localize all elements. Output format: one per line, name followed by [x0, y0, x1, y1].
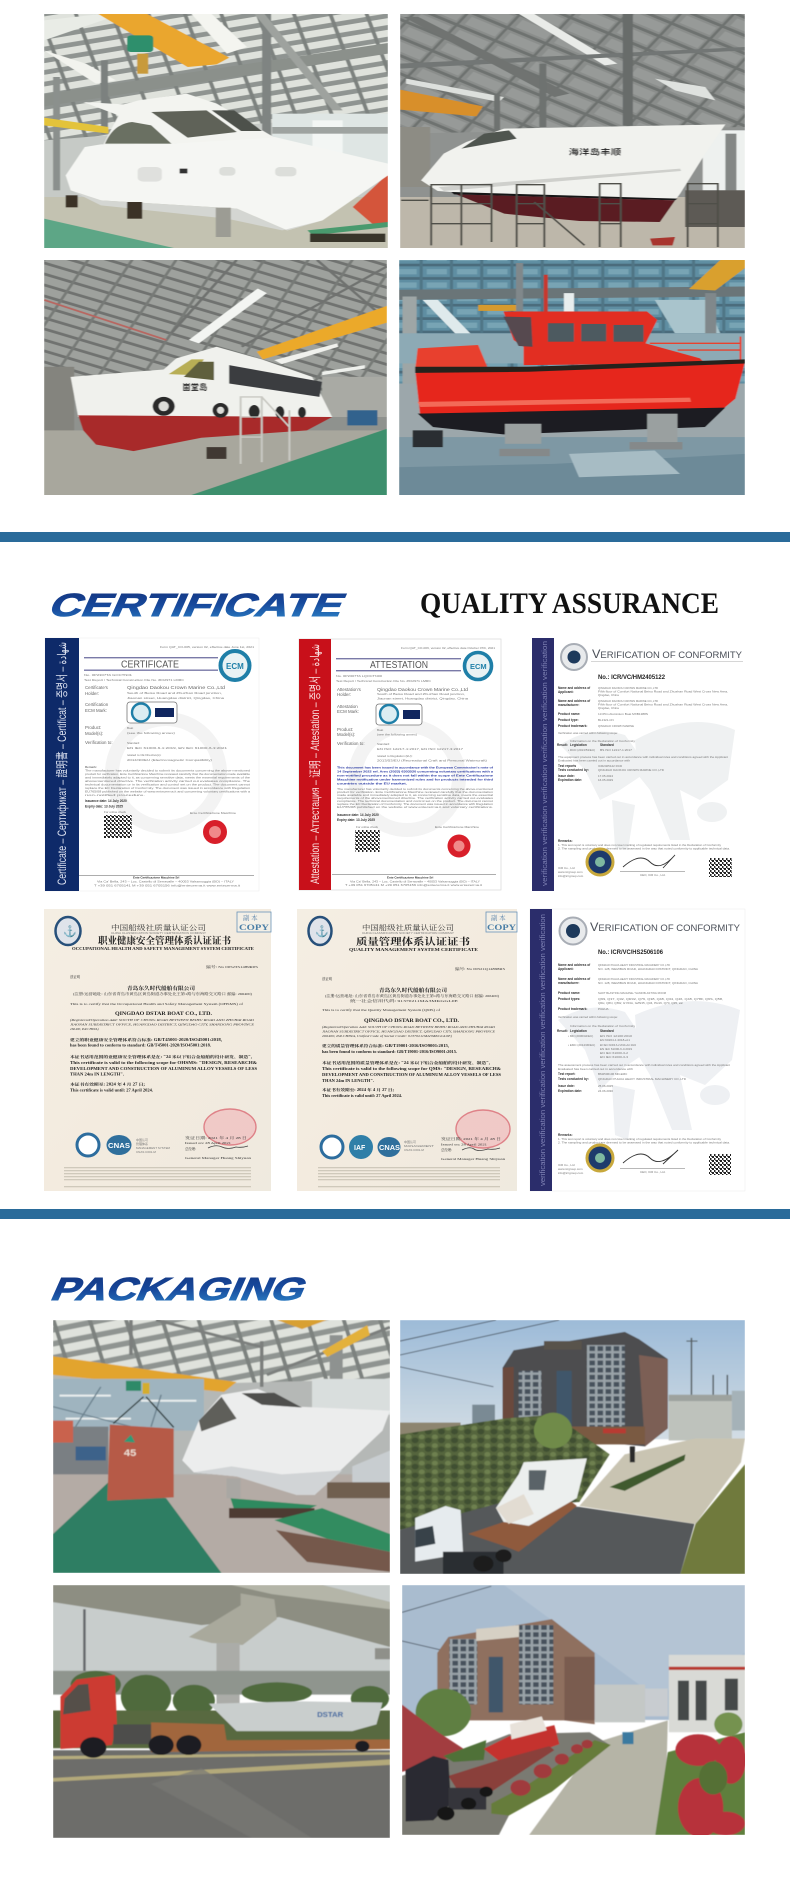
certificate: occupational health and safety management system: CHINA CLASSIFICATION SOCIETY CERTIFICATION COMPANY	[111, 931, 206, 935]
certificate: verification of conformity ICR/VC/HM2405122: Applicant:	[558, 690, 574, 694]
photo: red truck carrying hull under overpass	[53, 1585, 390, 1838]
certificate: verification of conformity ICR/VC/HM2405122: Remarks:	[558, 839, 573, 843]
certificate: quality management system: 青岛东久时代船舶有限公司	[379, 987, 447, 994]
certificate: ECM certificate: Test Report / Technical Construction File No. #IO2971 LMRC	[84, 678, 185, 682]
certificate: verification of conformity ICR/VC/HS2506106: PUHUA	[598, 1007, 609, 1011]
certificate: occupational health and safety management system: 建立的职业健康安全管理体系符合标准: GB/T45001-2020/ISO45001:2018,	[70, 1037, 222, 1042]
certificate: verification of conformity ICR/VC/HM2405122: Product name:	[558, 712, 580, 716]
certificate: verification of conformity ICR/VC/HS2506106: Test report:	[558, 1072, 575, 1076]
certificate: quality management system: 发证日期: 2021 年 4 月 28 日	[441, 1136, 501, 1141]
photo: red patrol boat in workshop	[399, 260, 745, 495]
certificate: ECM attestation: Product:	[337, 727, 353, 732]
certificate: verification of conformity ICR/VC/HM2405122: Legislation	[570, 743, 587, 747]
certificate: ECM certificate: ECM	[226, 662, 244, 671]
certificate: ECM certificate: Form QAT_CO-005, version 02, effective date June 1st, 2021	[160, 645, 254, 649]
certificate: occupational health and safety management system: CNAS	[108, 1143, 130, 1150]
heading: quality assurance: QUALITY ASSURANCE	[420, 587, 719, 620]
certificate: ECM certificate: ECM Mark:	[85, 708, 107, 713]
certificate: verification of conformity ICR/VC/HM2405122: manufacturer:	[558, 703, 579, 707]
certificate: verification of conformity ICR/VC/HS2506106: QINGDAO PUHUA HEAVY INDUSTRIAL MACHINERY CO.,LTD	[598, 1077, 687, 1081]
certificate: ECM certificate: Certificate – Сертификат – 證明書 – Certificat – 증명서 – شهادة	[54, 642, 69, 885]
certificate: ECM certificate: Certificate's	[85, 685, 109, 690]
certificate: occupational health and safety management system: QINGDAO DSTAR BOAT CO., LTD.	[115, 1011, 213, 1017]
heading: certificate: CERTIFICATE	[44, 588, 351, 624]
certificate: verification of conformity ICR/VC/HM2405122	[532, 638, 745, 891]
certificate: occupational health and safety management system: (Registered/Operation Add: SOUTH OF CHONG ROAD BETWEEN BEIHU ROAD AND ZHUHAI ROAD	[70, 1018, 255, 1022]
certificate: quality management system: 本证书适用范围的质量管理体系是在: "24 米以下铝合金船舶的设计研发、制造",	[322, 1060, 490, 1065]
certificate: verification of conformity ICR/VC/HM2405122: Fifth floor of Comfort National Beisu Road and Zhuzhan Road West Cross New Area,	[598, 702, 728, 706]
certificate: verification of conformity ICR/VC/HM2405122: Qingdao, China	[598, 693, 619, 697]
certificate: ECM certificate: T +39 051 6705141 M +39 051 6705156 info@entecerma.it www.entecerma.it	[94, 884, 240, 888]
certificate: verification of conformity ICR/VC/HS2506106: Product name:	[558, 991, 580, 995]
certificate: ECM attestation: Attestation's	[337, 687, 362, 692]
certificate: ECM certificate: Certification	[85, 702, 109, 707]
certificate: quality management system: 编号: No 00521Q14898RS	[455, 966, 505, 971]
certificate: quality management system: Issued on: 28 April 2021	[441, 1142, 487, 1146]
certificate: verification of conformity ICR/VC/HM2405122: QINGDAO CROWN MARINE	[598, 724, 634, 728]
certificate: ECM certificate: product for verification. Ente Certificazione Macchine reviewed carefully that the documentation made available	[85, 772, 250, 776]
certificate: ECM attestation: Macchine notification under harmonized rules and for products intended for third	[337, 778, 493, 782]
certificate: verification of conformity ICR/VC/HM2405122: Standard	[600, 743, 614, 747]
certificate: verification of conformity ICR/VC/HS2506106: manufacturer:	[558, 981, 579, 985]
certificate: ECM certificate: technical documentation or in its verification and control set on the product. The document cannot	[85, 782, 250, 786]
certificate: ECM certificate: and immediately adapted to it, as concerning sensitive data, meets the essential requirements of the	[85, 776, 250, 780]
certificate: verification of conformity ICR/VC/HM2405122: Verification was carried within following scope:	[558, 731, 618, 735]
certificate: verification of conformity ICR/VC/HS2506106: Tests conducted by:	[558, 1077, 589, 1081]
photo: truck carrying red boat outside factory	[402, 1585, 745, 1835]
certificate: occupational health and safety management system: ⚓	[63, 925, 77, 938]
certificate: quality management system: 中国船级社质量认证公司	[362, 923, 454, 932]
certificate: ECM certificate: 2014/30/EU (Electromagnetic Compatibility)	[127, 758, 212, 762]
divider band: middle	[0, 1209, 790, 1219]
certificate: ECM certificate: replace the EC Declaration of Conformity. The document was issued in accordance with Regulation	[85, 786, 250, 790]
certificate: ECM attestation: Jiaonan street, Huangdao district, Qingdao, China	[377, 696, 468, 700]
certificate: occupational health and safety management system: 职业健康安全管理体系认证证书	[98, 935, 231, 947]
certificate: verification of conformity ICR/VC/HM2405122: BS ISO 12217-1:2017	[600, 748, 632, 752]
certificate: ECM certificate: Product:	[85, 725, 101, 730]
certificate: ECM attestation: non-notified procedure as it does not fall within the scope of Ente Certificazione	[337, 774, 493, 778]
certificate: ECM attestation: Holder:	[337, 692, 351, 697]
certificate: occupational health and safety management system: JIAONAN SUBDISTRICT OFFICE, HUANGDAO DISTRICT, QINGDAO CITY, SHANDONG PROVINCE	[70, 1022, 255, 1028]
certificate: verification of conformity ICR/VC/HS2506106: 25.06.2025	[598, 1084, 613, 1088]
certificate: quality management system: 副 本	[491, 913, 506, 922]
certificate: ECM attestation: For online check	[356, 825, 379, 829]
certificate: verification of conformity ICR/VC/HS2506106: EN IEC 61000-3-2	[600, 1051, 628, 1055]
certificate: ECM certificate: Via Ca' Bella, 243 – Loc. Castello di Serravalle – 40053 Valsamoggia (BO) – ITALY	[97, 880, 234, 884]
certificate: quality management system: DEVELOPMENT AND CONSTRUCTION OF ALUMINUM ALLOY VESSELS OF LESS	[322, 1073, 501, 1077]
certificate: ECM certificate: Qingdao Daokou Crown Marine Co.,Ltd	[127, 685, 226, 690]
certificate: verification of conformity ICR/VC/HS2506106: www.icrgroup.com	[558, 1167, 583, 1171]
certificate: ECM attestation: No. 0P2307TA LQOCTN00	[336, 674, 382, 678]
certificate: verification of conformity ICR/VC/HM2405122: 17.05.2024	[598, 774, 613, 778]
certificate: occupational health and safety management system: 青岛东久时代船舶有限公司	[127, 985, 195, 992]
certificate: occupational health and safety management system: (注册/运营地址: 山东省青岛市黄岛区黄岛街道办事处北王第1路与东海路交叉路口 邮编: 266400)	[73, 991, 252, 996]
certificate: ECM attestation: related to Regulation (EU):	[377, 754, 413, 758]
certificate: verification of conformity ICR/VC/HM2405122: www.icrgroup.com	[558, 870, 583, 874]
certificate: verification of conformity ICR/VC/HS2506106: EN IEC 61000-6-2:2019+AC:2024	[600, 1043, 636, 1047]
divider band: top	[0, 532, 790, 542]
certificate: ECM attestation: (see the following annex)	[377, 732, 417, 736]
certificate: verification of conformity ICR/VC/HM2405122: Fifth floor of Comfort National Beisu Road and Zhuzhan Road West Cross New Area,	[598, 690, 728, 694]
certificate: ECM attestation: ECM Mark:	[337, 709, 359, 714]
certificate: occupational health and safety management system: COPY	[239, 922, 269, 932]
certificate: ECM attestation: Standard:	[377, 742, 390, 746]
certificate: verification of conformity ICR/VC/HM2405122: Product trademark:	[558, 724, 587, 728]
certificate: verification of conformity ICR/VC/HS2506106: Expiration date:	[558, 1089, 582, 1093]
certificate: verification of conformity ICR/VC/HS2506106: QINGDAO PUHUA HEAVY INDUSTRIAL MACHINERY CO.,LTD	[598, 963, 671, 967]
certificate: verification of conformity ICR/VC/HS2506106: • EMC (2014/30/EU)	[568, 1043, 595, 1047]
certificate: ECM certificate: Issuance date: 14 July 2020	[85, 799, 127, 803]
certificate: ECM certificate: EN IEC 61000-6-1:2019, EN IEC 61000-6-3:2021	[127, 746, 227, 750]
certificate: ECM attestation: replace the EC Declaration of Conformity. The document was issued in accordance with Regulation	[337, 802, 493, 806]
certificate: occupational health and safety management system: 总经理:	[185, 1146, 196, 1151]
certificate: verification of conformity ICR/VC/HS2506106: Product trademark:	[558, 1007, 587, 1011]
certificate: quality management system: CNAS C001-M	[404, 1148, 424, 1152]
certificate: verification of conformity ICR/VC/HS2506106: Standard	[600, 1029, 614, 1033]
certificate: ECM certificate: No. 0P2307TA GOCTN01	[84, 673, 132, 677]
certificate: quality management system: 建立的质量管理体系符合标准: GB/T19001-2016/ISO9001:2015,	[322, 1043, 449, 1048]
certificate: quality management system: 中国认可	[404, 1139, 416, 1144]
certificate: occupational health and safety management system: DEVELOPMENT AND CONSTRUCTION OF ALUMINUM ALLOY VESSELS OF LESS	[70, 1067, 257, 1071]
certificate: verification of conformity ICR/VC/HS2506106: Remarks:	[558, 1133, 573, 1137]
certificate: occupational health and safety management system: THAN 24m IN LENGTH".	[70, 1072, 124, 1076]
certificate: occupational health and safety management system: 本证书有效期至: 2024 年 4 月 27 日;	[70, 1082, 145, 1086]
certificate: verification of conformity ICR/VC/HM2405122: verification verification verification verification verification verification	[542, 641, 549, 886]
certificate: ECM attestation: product for verification. Ente Certificazione Macchine reviewed carefully that the documentation	[337, 790, 493, 794]
certificate: ECM certificate: Ente Certificazione Macchine	[190, 811, 236, 815]
certificate: quality management system: 本证书有效期至: 2024 年 4 月 27 日;	[322, 1087, 394, 1092]
certificate: verification of conformity ICR/VC/HS2506106: NO. 128, WEIZIBAN ROAD, HUANGDAO DISTRICT, QINGDAO, CHINA	[598, 967, 698, 971]
certificate: quality management system: 兹证明	[322, 976, 333, 981]
certificate: quality management system: 质量管理体系认证证书	[356, 936, 471, 948]
certificate: verification of conformity ICR/VC/HS2506106: Q69, Q37, Q32, QR32, Q76, Q38, Q48, Q34, Q46, Q48, Q78F, Q6S, Q58,	[598, 997, 723, 1001]
certificate: occupational health and safety management system: 管理体系	[136, 1141, 148, 1146]
certificate: occupational health and safety management system: 副 本	[243, 913, 258, 922]
certificate: ECM certificate: abovementioned directive. The verification activity carried out evaluates compliance. The	[85, 779, 250, 783]
certificate: verification of conformity ICR/VC/HS2506106: ICR Co., Ltd	[558, 1163, 575, 1167]
certificate: ECM certificate: Remark:	[85, 765, 97, 769]
photo: white motor yacht hull in workshop	[44, 14, 388, 248]
certificate: ECM attestation: made available and immediately adapted to it, as concerning sensitive data, meets the essential	[337, 793, 493, 797]
certificate: verification of conformity ICR/VC/HM2405122: Qingdao, China	[598, 706, 619, 710]
certificate: verification of conformity ICR/VC/HM2405122: CEO, ICR Co., Ltd.	[640, 873, 666, 877]
certificate: verification of conformity ICR/VC/HS2506106: Name and address of	[558, 963, 591, 967]
certificate: verification of conformity ICR/VC/HM2405122: 1. This test report is voluntary and does not cover marking of regulated requirements listed in the Declaration of Conformity	[558, 843, 721, 847]
certificate: ECM certificate: The manufacturer has voluntarily decided to submit its documents concerning the above-mentioned	[85, 768, 250, 772]
photo: yacht and shipping container in workshop	[53, 1320, 390, 1573]
certificate: occupational health and safety management system: This is to certify that the Occupational Health and Safety Management System (OHSMS) of	[70, 1002, 244, 1006]
certificate: verification of conformity ICR/VC/HS2506106: NO. 128, WEIZIBAN ROAD, HUANGDAO DISTRICT, QINGDAO, CHINA	[598, 981, 698, 985]
certificate: verification of conformity ICR/VC/HM2405122: VERIFICATION OF CONFORMITY	[592, 647, 742, 661]
certificate: verification of conformity ICR/VC/HM2405122: Name and address of	[558, 686, 591, 690]
certificate: ECM attestation: Attestation – Аттестация – 证明 – Attestation – 증명서 – شهادة	[308, 644, 322, 884]
certificate: ECM attestation: ATTESTATION	[370, 660, 428, 671]
certificate: verification of conformity ICR/VC/HS2506106: 1. This test report is voluntary and does not cover marking of regulated requirements listed in the Declaration of Conformity	[558, 1137, 721, 1141]
certificate: quality management system: This is to certify that the Quality Management System (QMS) of	[322, 1008, 441, 1012]
certificate: ECM attestation: Test Report / Technical Construction File No. #IO2971 LMRC	[336, 679, 432, 683]
certificate: verification of conformity ICR/VC/HS2506106: verification verification verification verification verification verification verification	[540, 914, 547, 1186]
certificate: verification of conformity ICR/VC/HS2506106: 24.06.2030	[598, 1089, 613, 1093]
certificate: verification of conformity ICR/VC/HM2405122: Tests conducted by:	[558, 768, 589, 772]
certificate: verification of conformity ICR/VC/HS2506106: • MD (2006/42/EC)	[568, 1034, 593, 1038]
certificate: ECM certificate: non-notified procedure.	[85, 793, 145, 797]
certificate: ECM attestation: Form QAT_CO-006, version 02, effective date October 07th, 2021	[401, 646, 495, 650]
photo: truck carrying yacht outside office building	[400, 1320, 745, 1574]
certificate: quality management system: General Manager Huang Shiyuan	[441, 1157, 505, 1161]
certificate: ECM attestation: Ente Certificazione Macchine	[435, 825, 479, 829]
certificate: verification of conformity ICR/VC/HS2506106: EN IEC 61000-6-4:2019	[600, 1047, 632, 1051]
certificate: ECM certificate: Boat	[127, 726, 133, 730]
certificate: ECM certificate: related to CE Directive(s):	[127, 753, 162, 757]
certificate: occupational health and safety management system: This certificate is valid until: 27 April 2024.	[70, 1088, 153, 1092]
certificate: verification of conformity ICR/VC/HS2506106: QINGDAO PUHUA HEAVY INDUSTRIAL MACHINERY CO.,LTD	[598, 977, 671, 981]
certificate: verification of conformity ICR/VC/HS2506106: Issue date:	[558, 1084, 575, 1088]
photo: white hull with dark red bottom on scaffolding	[400, 14, 745, 248]
photo: red truck carrying hull under overpass: DSTAR	[317, 1711, 343, 1719]
certificate: ECM certificate: Ente Certificazione Macchine Srl	[133, 876, 180, 880]
certificate: occupational health and safety management system: 中国认可	[136, 1137, 148, 1142]
certificate: ECM attestation: Boat	[377, 728, 383, 732]
certificate: verification of conformity ICR/VC/HS2506106: Name and address of	[558, 977, 591, 981]
photo: white and red passenger vessel in workshop	[44, 260, 387, 495]
photo: white and red passenger vessel in workshop: 崮堂岛	[182, 382, 207, 393]
certificate: occupational health and safety management system: MANAGEMENT SYSTEM	[136, 1146, 170, 1150]
certificate: quality management system: (Registered/Operation Add: SOUTH OF CHONG ROAD BETWEEN BEIHU ROAD AND ZHUHAI ROAD	[322, 1025, 496, 1029]
certificate: ECM certificate: Standard:	[127, 741, 140, 745]
certificate: verification of conformity ICR/VC/HS2506106: No.: ICR/VC/HS2506106	[598, 950, 664, 956]
certificate: ECM attestation: Verification to:	[337, 741, 365, 746]
certificate: verification of conformity ICR/VC/HS2506106: Information on the Declaration of Conformity	[570, 1024, 636, 1028]
certificate: occupational health and safety management system: Issued on: 28 April 2021	[185, 1141, 231, 1145]
certificate: verification of conformity ICR/VC/HM2405122: Test reports	[558, 764, 576, 768]
certificate: quality management system: 总经理:	[441, 1147, 452, 1152]
certificate: verification of conformity ICR/VC/HM2405122: QINGDAO DAOKOU CROWN MARINE CO.,LTD	[598, 699, 659, 703]
certificate: ECM certificate	[45, 638, 259, 891]
certificate: occupational health and safety management system	[44, 909, 271, 1191]
heading: packaging: PACKAGING	[46, 1272, 313, 1308]
certificate: ECM attestation: ECM	[470, 662, 487, 671]
certificate: quality management system: COPY	[487, 922, 516, 932]
certificate: occupational health and safety management system: 编号: No 00523S1489R0S	[206, 964, 258, 969]
certificate: quality management system: ⚓	[315, 925, 329, 938]
certificate: ECM attestation: countries outside the EU market.	[337, 782, 407, 786]
certificate: occupational health and safety management system: 266400, P.R.CHINA)	[70, 1027, 99, 1032]
certificate: occupational health and safety management system: has been found to conform to standard: GB/T45001-2020/ISO45001:2018.	[70, 1044, 211, 1048]
certificate: verification of conformity ICR/VC/HS2506106: info@icrgroup.com	[558, 1171, 584, 1175]
certificate: verification of conformity ICR/VC/HS2506106: EN IEC 61000-3-3	[600, 1055, 628, 1059]
certificate: verification of conformity ICR/VC/HM2405122: BL1321-CN	[598, 718, 614, 722]
certificate: verification of conformity ICR/VC/HM2405122: Issue date:	[558, 774, 575, 778]
certificate: verification of conformity ICR/VC/HS2506106: BM2506106 MD-EMC	[598, 1072, 628, 1076]
certificate: ECM certificate: (see the following annex)	[127, 731, 175, 735]
certificate: quality management system: IAF	[354, 1145, 366, 1152]
certificate: ECM attestation: 2013/53/EU (Recreational Craft and Personal Watercraft)	[377, 758, 487, 762]
certificate: ECM attestation: Expiry date: 13 July 2025	[337, 818, 375, 822]
certificate: verification of conformity ICR/VC/HM2405122: • RCD (2013/53/EU)	[568, 748, 595, 752]
certificate: verification of conformity ICR/VC/HS2506106: SHOT BLASTING MACHINE / SAND BLASTING ROOM	[598, 991, 666, 995]
certificate: ECM certificate: For online check	[104, 810, 127, 814]
certificate: ECM attestation: T +39 051 6705141 M +39 051 6705156 info@entecerma.it www.entecerma.it	[345, 883, 482, 887]
certificate: occupational health and safety management system: CNAS C001-M	[136, 1150, 156, 1154]
certificate: verification of conformity ICR/VC/HS2506106: EN ISO 12100:2010	[600, 1034, 632, 1038]
certificate: quality management system: This certificate is valid to the following scope for QMS: "DESIGN, RESEARCH&	[322, 1067, 501, 1071]
certificate: verification of conformity ICR/VC/HS2506106	[530, 909, 745, 1191]
certificate: ECM attestation: South of Beisu Road and Zhuzhan Road junction,	[377, 692, 465, 696]
certificate: ECM certificate: Verification to:	[85, 740, 113, 745]
certificate: verification of conformity ICR/VC/HS2506106: EN 60204-1:2018+A1	[600, 1038, 630, 1042]
certificate: ECM attestation: Issuance date: 14 July 2020	[337, 813, 379, 817]
photo: yacht and shipping container in workshop: 45	[124, 1449, 137, 1459]
certificate: quality management system: JIAONAN SUBDISTRICT OFFICE, HUANGDAO DISTRICT, QINGDAO CITY, SHANDONG PROVINCE	[322, 1030, 496, 1034]
certificate: verification of conformity ICR/VC/HM2405122: ICR Co., Ltd	[558, 866, 575, 870]
certificate: occupational health and safety management system: 发证日期: 2021 年 4 月 28 日	[185, 1135, 247, 1140]
photo: white hull with dark red bottom on scaffolding: 海洋岛丰顺	[568, 147, 622, 156]
certificate: quality management system: 266400, P.R.CHINA, Unified Code of Social Credit: 91370211MA3MKGGL0E)	[322, 1034, 453, 1039]
certificate: ECM certificate: Holder:	[85, 691, 99, 696]
certificate: ECM attestation: compliance. The technical documentation and control set on the product. The document cannot	[337, 799, 493, 803]
certificate: ECM certificate: Model(s):	[85, 731, 103, 736]
certificate: verification of conformity ICR/VC/HS2506106: Evaluated has been carried out in accordance with	[558, 1067, 633, 1071]
certificate: occupational health and safety management system: OCCUPATIONAL HEALTH AND SAFETY MANAGEMENT SYSTEM CERTIFICATE	[72, 947, 255, 951]
certificate: ECM attestation: EN ISO 12217-1:2017, EN ISO 12217-3:2017	[377, 747, 463, 751]
certificate: occupational health and safety management system: This certificate is valid to the following scope for OHSMS: "DESIGN, RESEARCH&	[70, 1061, 257, 1065]
certificate: verification of conformity ICR/VC/HM2405122: Product type:	[558, 718, 579, 722]
certificate: ECM certificate: South of Beisu Road and Zhuzhan Road junction,	[127, 691, 222, 695]
certificate: verification of conformity ICR/VC/HM2405122: 13.05m Aluminium Boat MXB1388S	[598, 712, 648, 716]
certificate: verification of conformity ICR/VC/HM2405122: Expiration date:	[558, 778, 582, 782]
certificate: quality management system: CNAS	[379, 1145, 400, 1152]
certificate: ECM attestation: Attestation	[337, 704, 358, 709]
certificate: quality management system: 统一社会信用代码: 91370211MA3MKGGL0E	[350, 998, 458, 1003]
certificate: verification of conformity ICR/VC/HS2506106: The assessment process has been carried out in accordance with individual rules and conditions agreed with the Applicant	[558, 1063, 730, 1067]
certificate: ECM attestation: Model(s):	[337, 732, 355, 737]
certificate: ECM attestation: The manufacturer has voluntarily decided to submit its documents concerning the above-mentioned	[337, 787, 493, 791]
certificate: occupational health and safety management system: 本证书适用范围的业健康安全管理体系是在: "24 米以下铝合金船舶的设计研发、制造",	[70, 1054, 252, 1059]
certificate: verification of conformity ICR/VC/HM2405122: ICR2405122 RCD	[598, 764, 623, 768]
certificate: verification of conformity ICR/VC/HM2405122: Name and address of	[558, 699, 591, 703]
certificate: occupational health and safety management system: General Manager Huang Shiyuan	[185, 1156, 251, 1160]
certificate: verification of conformity ICR/VC/HM2405122: Information on the Declaration of Conformity	[570, 739, 636, 743]
certificate: ECM attestation: Ente Certificazione Macchine Srl	[387, 876, 434, 880]
certificate: ECM attestation: EU765/08 published on the website of www.entecerma.it and voluntary certifications.	[337, 805, 493, 809]
certificate: ECM certificate: EU765/08 published on the website of www.entecerma.it and concerning voluntary certifications with a	[85, 790, 250, 794]
certificate: verification of conformity ICR/VC/HS2506106: Q6H, Q6N, Q6W, GY63A, GZN35, Q34, PH16, Q70, Q35, etc	[598, 1001, 684, 1005]
certificate: verification of conformity ICR/VC/HS2506106: Verification was carried within following scope:	[558, 1015, 618, 1019]
certificate: verification of conformity ICR/VC/HS2506106: Applicant:	[558, 967, 574, 971]
certificate: quality management system: (注册/运营地址: 山东省青岛市黄岛区黄岛街道办事处北王第1路与东海路交叉路口 邮编: 266400)	[325, 993, 499, 998]
certificate: ECM attestation: This document has been issued in accordance with the European Commission's note of	[337, 766, 493, 770]
certificate: occupational health and safety management system: 兹证明	[70, 974, 81, 979]
certificate: quality management system: has been found to conform to standard: GB/T19001-2016/ISO9001:2015.	[322, 1050, 457, 1054]
certificate: verification of conformity ICR/VC/HM2405122: Result:	[557, 743, 568, 747]
certificate: ECM attestation: 14 September 2022 ref. Ares (2022) 6303520 concerning voluntary certifications with a	[337, 770, 493, 774]
certificate: ECM attestation: requirements of the abovementioned directive. The verification activity carried out evaluates	[337, 796, 494, 800]
certificate: quality management system: MANAGEMENT	[404, 1144, 434, 1148]
certificate: quality management system: THAN 24m IN LENGTH".	[322, 1079, 374, 1083]
certificate: verification of conformity ICR/VC/HM2405122: Evaluated has been carried out in accordance with	[558, 758, 630, 762]
certificate: quality management system	[297, 909, 517, 1191]
certificate: verification of conformity ICR/VC/HS2506106: 2. The sampling and product are deemed to be assessed in the way that noted conformity to applicable technical data.	[558, 1140, 730, 1144]
certificate: quality management system: QINGDAO DSTAR BOAT CO., LTD.	[364, 1018, 460, 1024]
certificate: verification of conformity ICR/VC/HM2405122: No.: ICR/VC/HM2405122	[598, 675, 666, 681]
certificate: ECM certificate: CERTIFICATE	[121, 660, 179, 670]
certificate: occupational health and safety management system: 中国船级社质量认证公司	[111, 923, 206, 932]
certificate: ECM certificate: Expiry date: 13 July 2025	[85, 804, 123, 808]
certificate: ECM attestation	[299, 639, 501, 890]
certificate: verification of conformity ICR/VC/HM2405122: The equipment process has been carried out in accordance with individual rules and conditions agreed with the Applicant	[558, 755, 728, 759]
certificate: verification of conformity ICR/VC/HM2405122: 16.05.2029	[598, 778, 613, 782]
certificate: verification of conformity ICR/VC/HM2405122: QINGDAO DAOKOU CROWN MARINE CO.,LTD	[598, 768, 665, 772]
certificate: verification of conformity ICR/VC/HS2506106: VERIFICATION OF CONFORMITY	[590, 920, 740, 934]
certificate: quality management system: This certificate is valid until: 27 April 2024.	[322, 1094, 402, 1098]
certificate: quality management system: CHINA CLASSIFICATION SOCIETY CERTIFICATION COMPANY	[362, 931, 454, 935]
certificate: verification of conformity ICR/VC/HS2506106: Product types:	[558, 997, 580, 1001]
certificate: verification of conformity ICR/VC/HM2405122: 2. The sampling and product are deemed to be assessed in the way that noted conformity to applicable technical data.	[558, 846, 730, 850]
certificate: verification of conformity ICR/VC/HM2405122: info@icrgroup.com	[558, 874, 584, 878]
certificate: verification of conformity ICR/VC/HS2506106: Result:	[557, 1029, 568, 1033]
certificate: verification of conformity ICR/VC/HS2506106: Legislation	[570, 1029, 587, 1033]
certificate: ECM attestation: Qingdao Daokou Crown Marine Co.,Ltd	[377, 687, 469, 692]
certificate: verification of conformity ICR/VC/HM2405122: QINGDAO DAOKOU CROWN MARINE CO.,LTD	[598, 686, 659, 690]
certificate: quality management system: QUALITY MANAGEMENT SYSTEM CERTIFICATE	[349, 948, 479, 952]
certificate: ECM attestation: Via Ca' Bella, 243 – Loc. Castello di Serravalle – 40053 Valsamoggia (BO) – ITALY	[350, 880, 480, 884]
certificate: ECM certificate: Jiaonan street, Huangdao district, Qingdao, China	[127, 696, 224, 700]
certificate: verification of conformity ICR/VC/HS2506106: CEO, ICR Co., Ltd.	[640, 1170, 666, 1174]
